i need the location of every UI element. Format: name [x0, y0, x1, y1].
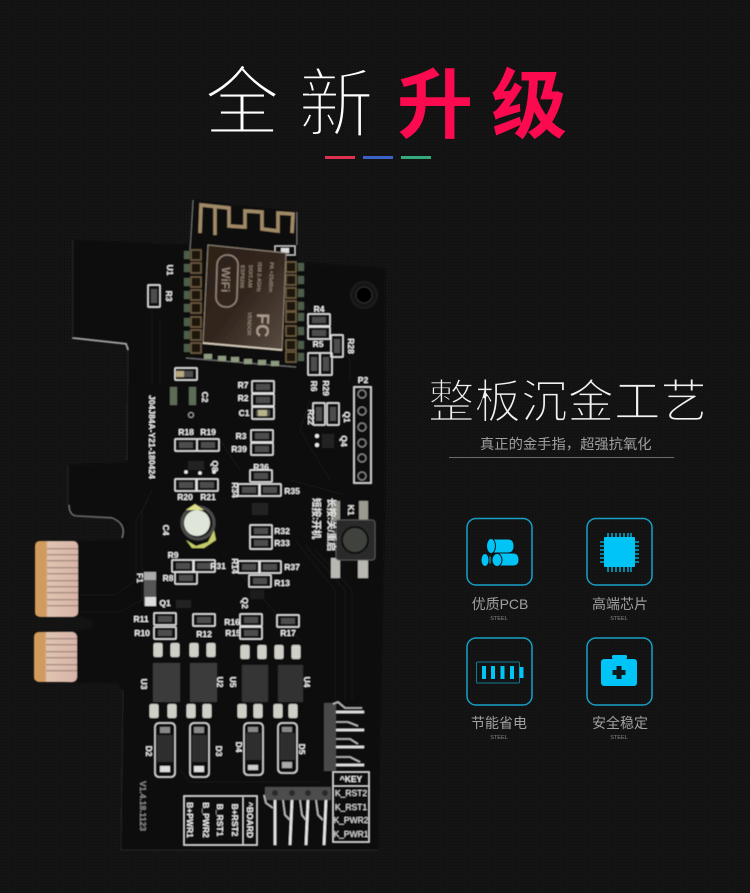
optocouplers: U5 — [228, 677, 238, 688]
lower silkscreen labels and parts: R31 — [210, 561, 226, 571]
lower silkscreen labels and parts: R8 — [163, 573, 174, 583]
upper silkscreen labels and parts: R18 — [178, 427, 194, 437]
optocouplers: U3 — [139, 679, 149, 690]
board label box: B_RST1 — [215, 804, 225, 837]
title: 升 — [397, 64, 473, 149]
icon: pipes — [481, 538, 519, 566]
optocouplers: U4 — [302, 677, 312, 688]
metal shield — [203, 245, 286, 350]
upper silkscreen labels and parts: R28 — [346, 338, 356, 354]
label: 高端芯片 — [592, 596, 648, 612]
icon frame — [587, 518, 652, 585]
copper traces — [80, 300, 352, 782]
upper silkscreen labels and parts: J04J84A-Y21-180424 — [147, 395, 157, 479]
sublabel: STEEL — [490, 735, 508, 741]
feature: quality PCB — [467, 518, 532, 622]
shield markings: WiFi — [218, 267, 233, 293]
mounting tab hole — [86, 257, 112, 283]
bottom pin header — [264, 787, 331, 845]
sublabel: STEEL — [610, 735, 628, 741]
key label box: K_PWR1 — [334, 829, 369, 839]
board label box — [184, 796, 257, 845]
lower silkscreen labels and parts: R33 — [274, 538, 290, 548]
feature: high-end chip — [587, 518, 652, 622]
button silkscreen note: 长按:关/重启 — [325, 498, 337, 551]
lower silkscreen labels and parts: Q1 — [159, 598, 171, 608]
upper silkscreen labels and parts: Q4 — [339, 435, 349, 447]
shield markings: FC — [252, 313, 273, 338]
upper silkscreen labels and parts: R19 — [200, 427, 216, 437]
circuit board photo — [34, 200, 385, 851]
icon frame — [467, 638, 532, 705]
lower silkscreen labels and parts: R13 — [274, 578, 290, 588]
lower silkscreen labels and parts: R16 — [224, 617, 240, 627]
board outline — [34, 240, 385, 851]
module base — [186, 200, 297, 367]
icon frame — [467, 518, 532, 585]
upper silkscreen labels and parts: U1 — [165, 265, 175, 276]
board label box: ^BOARD — [245, 802, 255, 838]
diodes: D3 — [214, 746, 224, 757]
optocouplers: U2 — [215, 677, 225, 688]
upper silkscreen labels and parts: R3 — [164, 291, 174, 302]
gold finger connector lower — [34, 632, 77, 682]
lower silkscreen labels and parts: R12 — [196, 629, 212, 639]
sublabel: STEEL — [610, 616, 628, 622]
lower silkscreen labels and parts: R11 — [133, 614, 149, 624]
shield markings: ESP8266 — [238, 265, 245, 288]
lower silkscreen labels and parts: R36 — [253, 462, 269, 472]
shield markings: VENDOR — [245, 312, 252, 336]
gold finger connector upper — [35, 541, 78, 617]
lower silkscreen labels and parts: R34 — [230, 482, 240, 498]
title: 级 — [491, 64, 567, 149]
feature: safe and stable — [587, 638, 652, 741]
push button K1: K1 — [346, 505, 356, 516]
version code: V1.4.18.1123 — [138, 781, 148, 831]
feature: energy saving — [467, 638, 532, 741]
icon: battery — [476, 662, 524, 683]
wifi module — [184, 200, 304, 367]
key label box: ^KEY — [340, 774, 363, 784]
key label box: K_PWR2 — [334, 815, 369, 825]
module right pads — [286, 262, 304, 362]
title: 新 — [298, 63, 374, 148]
key label box: K_RST2 — [335, 788, 367, 798]
button silkscreen note — [310, 498, 337, 551]
right pin header — [324, 702, 364, 771]
shield markings — [216, 255, 274, 338]
lower silkscreen labels and parts: F1 — [135, 573, 145, 583]
lower silkscreen labels and parts: R14 — [230, 558, 240, 574]
board label box: B+RST2 — [230, 804, 240, 837]
upper silkscreen labels and parts: R2 — [238, 393, 249, 403]
icon: medical kit — [601, 655, 637, 686]
title accent dashes — [325, 156, 431, 159]
right mounting hole — [351, 282, 377, 308]
icon frame — [587, 638, 652, 705]
diodes — [144, 723, 307, 777]
title: 全 — [204, 61, 280, 146]
lower silkscreen labels and parts: R37 — [284, 562, 300, 572]
upper silkscreen labels and parts: R22 — [306, 409, 316, 425]
upper silkscreen labels and parts — [147, 265, 368, 502]
upper silkscreen labels and parts: R21 — [200, 492, 216, 502]
heading divider — [449, 457, 674, 458]
antenna capacitor — [275, 246, 295, 255]
upper silkscreen labels and parts: P2 — [358, 375, 368, 385]
lower silkscreen labels and parts: R17 — [280, 628, 296, 638]
upper silkscreen labels and parts: C2 — [200, 392, 210, 403]
upper silkscreen labels and parts: C1 — [239, 408, 250, 418]
label: 安全稳定 — [592, 715, 648, 731]
lower silkscreen labels and parts: Q2 — [240, 597, 250, 609]
upper silkscreen labels and parts: R29 — [321, 380, 331, 396]
diodes: D5 — [297, 744, 307, 755]
upper silkscreen labels and parts: Q1 — [342, 411, 352, 423]
key label box: K_RST1 — [335, 802, 367, 812]
label: 优质PCB — [472, 596, 528, 612]
key label box — [333, 772, 369, 842]
capacitor C4 — [161, 504, 216, 548]
heading: board gold process: 整板沉金工艺 — [428, 376, 707, 428]
board edge highlights — [68, 240, 378, 850]
upper silkscreen labels and parts: R6 — [309, 381, 319, 392]
lower silkscreen labels and parts — [133, 462, 300, 639]
shield markings: DOIT.AM — [246, 265, 253, 288]
push button K1 — [331, 501, 375, 578]
upper silkscreen labels and parts: R7 — [238, 380, 249, 390]
P2 header — [354, 387, 371, 483]
title — [204, 61, 567, 149]
capacitor C4: C4 — [161, 525, 171, 536]
upper silkscreen labels and parts: R5 — [313, 339, 324, 349]
upper silkscreen labels and parts: R3 — [236, 431, 247, 441]
shield markings: PA +25dBm — [267, 262, 274, 292]
button silkscreen note: 短按:开机 — [310, 498, 322, 540]
antenna trace — [200, 205, 293, 235]
shield lower edge highlight — [203, 343, 282, 350]
board label box: B+PWR1 — [185, 802, 195, 838]
upper silkscreen labels and parts: Q8 — [210, 460, 220, 472]
upper silkscreen labels and parts: R39 — [231, 444, 247, 454]
subheading: 真正的金手指，超强抗氧化 — [480, 435, 652, 453]
module left pads — [184, 250, 201, 353]
diodes: D2 — [144, 746, 154, 757]
module bottom pads — [204, 354, 279, 366]
shield markings: ISM 2.4GHz — [255, 262, 262, 292]
lower silkscreen labels and parts: R9 — [168, 550, 179, 560]
lower silkscreen labels and parts: R15 — [225, 628, 241, 638]
lower silkscreen labels and parts: R32 — [274, 526, 290, 536]
optocouplers — [139, 643, 312, 718]
icon: chip — [600, 533, 639, 572]
lower silkscreen labels and parts: R10 — [134, 628, 150, 638]
board label box: B_PWR2 — [201, 802, 211, 838]
label: 节能省电 — [471, 715, 527, 731]
lower silkscreen labels and parts: R35 — [284, 486, 300, 496]
diodes: D4 — [234, 742, 244, 753]
upper silkscreen labels and parts: R4 — [314, 304, 325, 314]
upper silkscreen labels and parts: R20 — [177, 492, 193, 502]
sublabel: STEEL — [490, 616, 508, 622]
